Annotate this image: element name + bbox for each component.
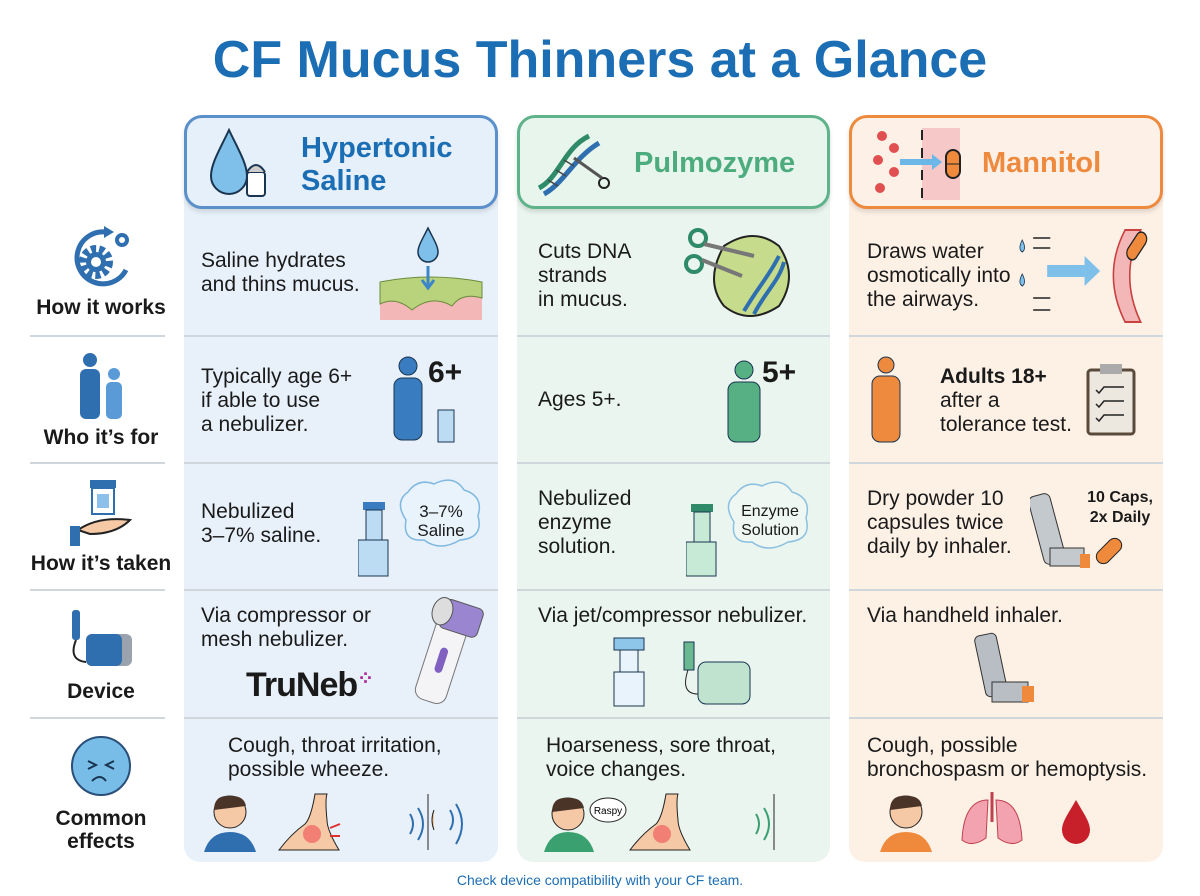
text: saline how it works: Saline hydrates <box>201 249 346 272</box>
text: pulmozyme how taken: solution. <box>538 535 616 558</box>
header: pulmozyme <box>517 115 830 209</box>
title: CF Mucus Thinners at a Glance <box>213 31 987 89</box>
text: mannitol how taken: Dry powder 10 <box>867 487 1004 510</box>
icon: gears with circular arrow <box>74 226 129 286</box>
icon: nebulizer cup with saline cloud: 3–7% <box>419 502 463 521</box>
text: pulmozyme device: Via jet/compressor nebulizer. <box>538 604 807 627</box>
text: mannitol how taken: daily by inhaler. <box>867 535 1012 558</box>
text: mannitol how it works <box>867 240 1011 311</box>
row label: common effects: Common <box>56 807 146 830</box>
text: saline how taken: 3–7% saline. <box>201 524 321 547</box>
text: saline who: Typically age 6+ <box>201 365 352 388</box>
icon: nebulizer cup with saline cloud <box>358 479 480 576</box>
row label: how it's taken: How it’s taken <box>31 552 171 575</box>
text: pulmozyme how it works: in mucus. <box>538 288 628 311</box>
text: saline how taken: Nebulized <box>201 500 294 523</box>
text: pulmozyme how taken: Nebulized <box>538 487 631 510</box>
row label: common effects: effects <box>67 830 135 853</box>
text: mannitol who <box>940 365 1072 436</box>
panel: hypertonic saline column <box>184 150 498 862</box>
text: pulmozyme how taken <box>538 487 631 558</box>
text: saline how it works: and thins mucus. <box>201 273 360 296</box>
icon: jet nebulizer and compressor <box>614 638 750 706</box>
icon: nebulizer with enzyme cloud: Enzyme <box>741 503 799 520</box>
text: mannitol how it works: Draws water <box>867 240 984 263</box>
text: saline effects: possible wheeze. <box>228 758 389 781</box>
text: mannitol how taken <box>867 487 1012 558</box>
row label: how it works: How it works <box>36 296 166 319</box>
icon: hand with medicine jar <box>70 480 132 546</box>
text: pulmozyme effects: Hoarseness, sore throat, <box>546 734 776 757</box>
text: saline how it works <box>201 249 360 296</box>
icon: child 6+ with nebulizer: 6+ <box>428 356 462 389</box>
text: saline how taken <box>201 500 321 547</box>
row label: how it works <box>36 226 166 319</box>
text: saline effects: Cough, throat irritation, <box>228 734 442 757</box>
icon: nebulizer cup with saline cloud: Saline <box>417 521 465 540</box>
text: pulmozyme how taken: enzyme <box>538 511 612 534</box>
header: hypertonic saline <box>184 115 498 209</box>
icons: hoarse, sore throat, voice (pulmozyme) <box>544 794 774 852</box>
icon: inhaler with capsule: 10 Caps, <box>1087 489 1153 506</box>
row label: device: Device <box>67 680 135 703</box>
icon: drop into mucus layer <box>380 226 482 320</box>
icon: compressor nebulizer <box>72 610 132 666</box>
text: saline device: Via compressor or <box>201 604 371 627</box>
row label: common effects <box>56 736 146 853</box>
text: pulmozyme how it works: strands <box>538 264 607 287</box>
icon: handheld inhaler <box>974 632 1034 702</box>
icon: child 5+ <box>728 356 796 442</box>
header: mannitol: Mannitol <box>982 147 1101 179</box>
text: mannitol how it works: the airways. <box>867 288 979 311</box>
text: pulmozyme how it works <box>538 240 632 311</box>
text: mannitol who: Adults 18+ <box>940 365 1047 388</box>
row label: device <box>67 610 135 703</box>
icon: water arrow into airway <box>1020 229 1148 323</box>
text: mannitol effects: bronchospasm or hemoptysis. <box>867 758 1147 781</box>
header: mannitol <box>849 115 1163 209</box>
panel: pulmozyme column <box>517 150 830 862</box>
text: mannitol effects <box>867 734 1147 782</box>
icon: water drop and salt shaker <box>210 128 266 197</box>
icons: cough, lungs, blood drop (mannitol) <box>876 790 1106 852</box>
text: saline device: mesh nebulizer. <box>201 628 348 651</box>
icon: child 5+: 5+ <box>762 356 796 389</box>
header: hypertonic saline: Hypertonic <box>301 132 452 164</box>
text: mannitol who: tolerance test. <box>940 413 1072 436</box>
icon: nebulizer with enzyme cloud <box>686 481 808 576</box>
icon: nebulizer with enzyme cloud: Solution <box>741 522 799 539</box>
text: pulmozyme how it works: Cuts DNA <box>538 240 631 263</box>
icon: inhaler with capsule <box>1030 489 1153 568</box>
text: mannitol who: after a <box>940 389 1000 412</box>
header: pulmozyme: Pulmozyme <box>634 147 795 179</box>
icon: adult orange <box>872 356 900 442</box>
text: saline who: a nebulizer. <box>201 413 308 436</box>
footer note: Check device compatibility with your CF team. <box>457 872 743 888</box>
icons: hoarse, sore throat, voice (pulmozyme): Raspy <box>594 806 622 817</box>
text: saline who: if able to use <box>201 389 320 412</box>
row label: who it's for: Who it’s for <box>44 426 158 449</box>
text: mannitol how it works: osmotically into <box>867 264 1011 287</box>
logo: TruNeb: TruNeb⁘ <box>246 666 373 704</box>
icon: adult and child <box>80 353 122 419</box>
text: pulmozyme who: Ages 5+. <box>538 388 621 411</box>
icon: unwell face <box>71 736 131 796</box>
row label: how it's taken <box>31 480 171 575</box>
text: mannitol device: Via handheld inhaler. <box>867 604 1063 627</box>
text: saline device <box>201 604 371 651</box>
text: saline who <box>201 365 352 436</box>
text: saline effects <box>228 734 442 781</box>
text: pulmozyme effects: voice changes. <box>546 758 686 781</box>
text: mannitol effects: Cough, possible <box>867 734 1018 757</box>
header: hypertonic saline: Saline <box>301 165 386 197</box>
icon: clipboard checklist <box>1086 364 1136 436</box>
text: pulmozyme effects <box>546 734 776 781</box>
text: mannitol how taken: capsules twice <box>867 511 1004 534</box>
icon: DNA with scissors <box>538 134 610 196</box>
icon: child 6+ with nebulizer <box>394 356 462 442</box>
row label: who it's for <box>44 353 158 449</box>
panel: mannitol column <box>849 150 1163 862</box>
icon: TruNeb handheld mesh nebulizer <box>414 597 484 704</box>
icon: scissors cutting DNA in mucus <box>684 228 790 317</box>
icons: cough, throat, wheeze (saline) <box>204 794 463 852</box>
icon: inhaler with capsule: 2x Daily <box>1090 509 1150 526</box>
icon: osmosis molecules and capsule <box>873 128 961 200</box>
